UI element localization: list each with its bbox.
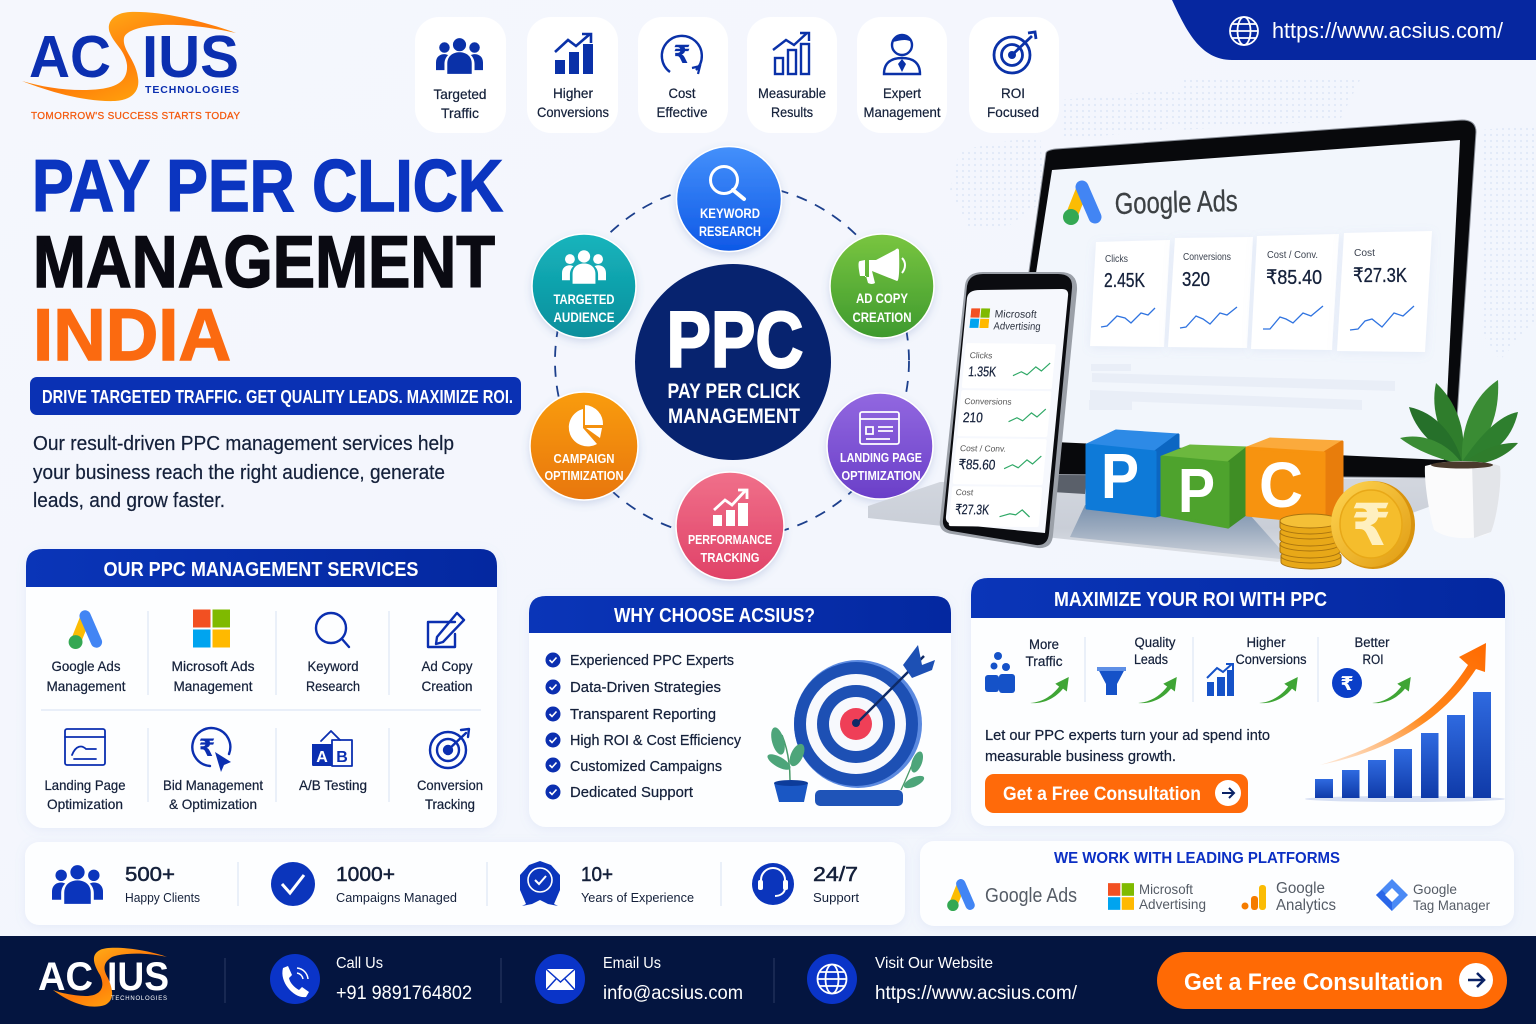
roi item: quality leads: Quality [1134,635,1176,650]
services labels: Management [46,678,126,694]
footer logo: AC [38,955,93,999]
node: campaign optimization: CAMPAIGN [554,451,614,466]
intro paragraph [33,432,454,512]
footer cta button: Get a Free Consultation [1184,969,1443,996]
icon: conversion target [430,729,469,768]
why checklist: Data-Driven Strategies [570,679,721,696]
logo: TOMORROW'S SUCCESS STARTS TODAY [31,111,240,122]
badge: targeted traffic: Targeted [434,86,486,102]
target illustration [765,645,935,806]
node: landing page optimization: LANDING PAGE [840,451,922,465]
badge: higher conversions: Higher [553,85,593,101]
footer logo [38,948,169,1007]
node: ad copy creation [830,234,934,338]
roi item: better roi: Better [1354,635,1390,650]
icon: globe [1230,17,1258,45]
roi growth chart [1305,643,1505,802]
node: targeted audience: AUDIENCE [554,310,614,325]
platform: google tag manager: Google [1413,881,1457,897]
badge: higher conversions: Conversions [537,104,609,120]
metric card: conversions [1168,237,1253,348]
title: INDIA [33,295,231,376]
ppc hub diagram [530,146,934,580]
services labels: Research [306,678,360,694]
roi item: higher conversions: Conversions [1236,652,1307,667]
block: C orange [1247,439,1342,523]
coin stack [1280,514,1341,569]
icon: microsoft [193,610,230,648]
phone content [949,308,1059,527]
stat: support: Support [813,891,860,905]
roi item: more traffic [985,637,1069,703]
logo [22,12,240,122]
services labels: Creation [422,678,472,694]
center circle: PAY PER CLICK [668,379,801,403]
block: P green [1162,446,1247,527]
laptop base [868,478,1434,562]
intro paragraph: leads, and grow faster. [33,489,225,512]
why checklist: Experienced PPC Experts [570,652,734,669]
metric card: clicks [1090,240,1170,347]
why checklist: Transparent Reporting [570,706,716,723]
badge: measurable results: Results [771,104,813,120]
phone content: Cost / Conv. [960,443,1006,454]
metric card: cost: ₹27.3K [1353,265,1408,287]
panel: platforms [920,841,1514,926]
services labels: Optimization [47,796,123,812]
roi copy: measurable business growth. [985,748,1176,765]
logo: TECHNOLOGIES [145,84,239,96]
laptop illustration [868,120,1476,562]
node: targeted audience [532,234,636,338]
roi item: better roi [1332,635,1411,703]
badge: targeted traffic: Traffic [441,105,479,121]
title: MANAGEMENT [33,222,495,303]
feature badges row [415,17,1059,133]
services labels: A/B Testing [299,777,367,793]
platform: google ads [947,884,1077,911]
icon: bid rupee: ₹ [199,735,215,762]
icon: landing page [65,729,105,765]
roi item: more traffic: Traffic [1026,654,1063,669]
center circle [635,264,831,460]
stat: happy clients: 500+ [125,864,175,886]
badge: measurable results: Measurable [758,85,826,101]
icon: search [316,613,349,647]
panel: why choose acsius [529,596,951,827]
services labels: Bid Management [163,777,263,793]
badge: expert management: Expert [883,85,921,101]
stat: happy clients: Happy Clients [125,891,200,905]
roi copy: Let our PPC experts turn your ad spend into [985,727,1270,744]
node: campaign optimization: OPTIMIZATION [544,468,624,483]
coins [1280,481,1415,569]
roi item: better roi: ROI [1362,652,1384,667]
roi item: better roi: ₹ [1340,674,1354,695]
icon: bid rupee [192,728,231,772]
phone content: Clicks [969,350,993,360]
placeholder rows [1089,364,1395,410]
plant and pot left [765,726,808,802]
contact: website [807,954,1078,1004]
stat: years of experience: Years of Experience [581,891,694,905]
icon: ad copy edit [428,613,464,647]
plant right [901,750,926,791]
badge: cost effective: Effective [656,104,708,120]
platform: google analytics: Google [1276,880,1325,897]
contact: email: info@acsius.com [603,982,743,1004]
why checklist: Customized Campaigns [570,758,722,775]
platform: microsoft advertising: Microsoft [1139,881,1193,897]
phone [940,272,1077,548]
google ads wordmark: Google Ads [1114,185,1238,221]
node: ad copy creation: AD COPY [856,291,908,306]
platform: google analytics [1242,880,1336,914]
roi item: higher conversions: Higher [1246,635,1286,650]
phone content: ₹85.60 [958,456,996,473]
panel: platforms: WE WORK WITH LEADING PLATFORMS [1054,850,1340,867]
phone content: Conversions [964,396,1012,407]
stat: campaigns managed [271,862,457,906]
metric card: cost [1337,231,1432,352]
node: targeted audience: TARGETED [554,292,615,307]
block: C orange: C [1259,449,1303,521]
services labels [44,658,483,812]
badge: targeted traffic [415,17,506,133]
ppc blocks [1087,431,1342,527]
logo: AC [29,24,111,90]
node: performance tracking: TRACKING [700,550,760,565]
metric card: cost per conversion [1251,234,1339,350]
metric card: cost: Cost [1354,247,1375,259]
badge: cost effective: Cost [668,85,696,101]
metric card: clicks: Clicks [1105,254,1128,265]
roi item: higher conversions [1207,635,1307,703]
badge: roi focused: ROI [1001,85,1025,101]
platform: google analytics: Analytics [1276,897,1336,914]
node: campaign optimization [530,392,638,500]
platform: google tag manager [1376,879,1490,913]
intro paragraph: your business reach the right audience, generate [33,461,445,484]
services labels: Google Ads [52,658,120,674]
block: P green: P [1178,457,1215,526]
stat: campaigns managed: 1000+ [336,864,395,886]
services labels: Ad Copy [422,658,472,674]
plant [1400,380,1518,538]
roi item: quality leads [1097,635,1177,703]
why checklist: High ROI & Cost Efficiency [570,732,741,749]
icon: ab test: A [316,749,328,766]
laptop lid [1000,120,1476,478]
node: keyword research [676,146,782,252]
stat: happy clients [52,864,200,905]
footer [0,936,1536,1024]
roi button: Get a Free Consultation [1003,783,1201,805]
roi copy [985,727,1270,765]
phone content: Microsoft [994,308,1037,321]
google ads logo [1063,187,1095,225]
why header [529,596,951,633]
node: performance tracking [676,472,784,580]
contact: phone: +91 9891764802 [336,982,472,1004]
contact: phone: Call Us [336,955,383,972]
phone content: Cost [955,487,974,497]
intro paragraph: Our result-driven PPC management services help [33,432,454,455]
roi header: MAXIMIZE YOUR ROI WITH PPC [1054,589,1327,611]
rupee coin: ₹ [1351,493,1391,558]
why checklist: Dedicated Support [570,784,694,801]
roi item: more traffic: More [1029,637,1059,652]
title: PAY PER CLICK [32,146,503,227]
footer logo: IUS [107,955,169,999]
badge: cost effective: ₹ [673,41,691,69]
why header: WHY CHOOSE ACSIUS? [614,605,815,627]
platform: google tag manager: Tag Manager [1413,897,1490,913]
metric card: conversions: Conversions [1183,252,1231,263]
node: keyword research: KEYWORD [700,206,760,221]
badge: cost effective [638,17,728,133]
node: ad copy creation: CREATION [852,310,912,325]
contact: website: Visit Our Website [875,955,993,972]
phone content: ₹27.3K [954,501,990,518]
badge: expert management: Management [864,104,941,120]
platform: microsoft advertising: Advertising [1139,896,1206,912]
services labels: Tracking [425,796,475,812]
badge: roi focused: Focused [987,104,1039,120]
laptop screen [1010,140,1460,460]
platform: microsoft advertising [1108,881,1206,912]
services labels: Conversion [417,777,483,793]
stat: years of experience: 10+ [581,864,613,886]
services header: OUR PPC MANAGEMENT SERVICES [104,559,418,581]
platform: google ads: Google Ads [985,885,1077,907]
footer logo: TECHNOLOGIES [111,996,167,1002]
panel: stats [25,842,905,925]
url tab [1172,0,1536,60]
tagline strip: DRIVE TARGETED TRAFFIC. GET QUALITY LEADS. MAXIMIZE ROI. [42,387,513,407]
stat: support [752,863,860,905]
roi header [971,578,1505,618]
badge: roi focused [969,17,1059,133]
contact: phone [270,954,472,1004]
services labels: Keyword [308,658,358,674]
services labels: & Optimization [169,796,257,812]
phone content: 1.35K [968,363,998,379]
tagline strip [30,377,521,415]
contact: email [535,954,743,1004]
stat: campaigns managed: Campaigns Managed [336,891,457,905]
block: P blue [1087,431,1178,516]
services labels: Landing Page [44,777,126,793]
url text: https://www.acsius.com/ [1272,18,1504,43]
metric card: clicks: 2.45K [1104,270,1146,292]
metric card: conversions: 320 [1182,269,1210,291]
badge: expert management [857,17,947,133]
roi item: quality leads: Leads [1134,652,1168,667]
badge: higher conversions [527,17,618,133]
panel: ppc services [26,549,497,828]
contact: website: https://www.acsius.com/ [875,982,1078,1004]
services labels: Microsoft Ads [172,658,254,674]
badge: measurable results [747,17,837,133]
footer cta button [1157,952,1507,1009]
icon: google ads [69,616,96,649]
services header [26,549,497,587]
node: landing page optimization: OPTIMIZATION [842,469,920,483]
metric card: cost per conversion: ₹85.40 [1266,267,1322,289]
phone content: Advertising [993,320,1041,333]
phone content: 210 [962,409,984,425]
roi button [985,774,1248,813]
stat: support: 24/7 [813,864,858,886]
why checklist [546,652,741,801]
services labels: Management [174,678,253,694]
icon: ab test [312,731,352,766]
node: landing page optimization [827,393,933,499]
title [32,146,503,376]
panel: maximize roi [971,578,1505,826]
contact: email: Email Us [603,955,661,972]
logo: IUS [142,24,239,90]
node: performance tracking: PERFORMANCE [688,532,772,547]
node: keyword research: RESEARCH [699,224,761,239]
icon: ab test: B [336,749,348,766]
center circle: PPC [666,295,804,384]
metric card: cost per conversion: Cost / Conv. [1267,250,1318,261]
center circle: MANAGEMENT [668,404,800,428]
stat: years of experience [520,861,694,906]
block: P blue: P [1101,440,1139,512]
dotted world map [950,78,1536,360]
